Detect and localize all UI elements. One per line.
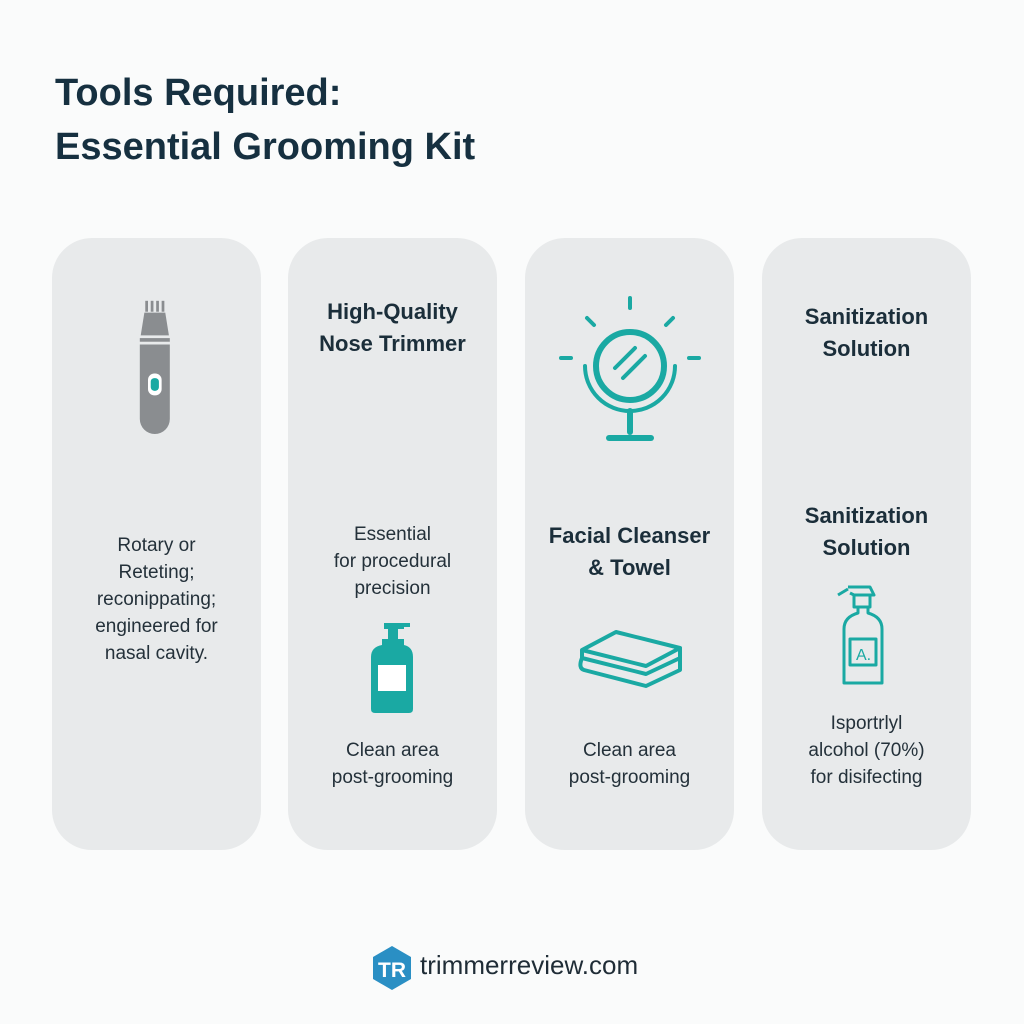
text: trimmer desc [95, 535, 218, 664]
text [808, 713, 925, 788]
icon: spray bottle [837, 586, 884, 684]
text: Essential [354, 524, 431, 545]
text: trimmer desc: Rotary or [117, 535, 196, 556]
title [55, 72, 475, 168]
text: Isportrlyl [831, 713, 902, 734]
heading: Sanitization [805, 304, 928, 329]
text: post-grooming [332, 767, 453, 788]
heading [549, 523, 710, 580]
logo [373, 946, 638, 990]
heading: Solution [822, 535, 910, 560]
heading: Solution [822, 336, 910, 361]
icon: towel [578, 630, 682, 688]
icon: pump bottle [371, 623, 413, 713]
heading: Nose Trimmer [319, 331, 466, 356]
heading: & Towel [588, 555, 671, 580]
title: Tools Required: [55, 72, 341, 114]
text: url: trimmerreview.com [420, 950, 638, 980]
heading [805, 503, 928, 560]
panel: nose trimmer [288, 238, 497, 850]
icon: TR hexagon: TR [378, 959, 406, 982]
icon: spray bottle: A. [856, 647, 871, 664]
text: precision [354, 578, 431, 599]
title: Essential Grooming Kit [55, 126, 475, 168]
heading: High-Quality [327, 299, 458, 324]
panel: sanitization [762, 238, 971, 850]
text: trimmer desc: nasal cavity. [105, 643, 208, 664]
text: for procedural [334, 551, 451, 572]
heading: Facial Cleanser [549, 523, 710, 548]
panel: trimmer [52, 238, 261, 850]
text: alcohol (70%) [808, 740, 925, 761]
icon: TR hexagon [373, 946, 411, 990]
heading: Sanitization [805, 503, 928, 528]
heading [805, 304, 928, 361]
text: trimmer desc: reconippating; [97, 589, 216, 610]
text: trimmer desc: Reteting; [118, 562, 195, 583]
text: Clean area [346, 740, 439, 761]
text [569, 740, 690, 788]
panel: cleanser [525, 238, 734, 850]
heading [319, 299, 466, 356]
icon: mirror [559, 296, 701, 441]
text: post-grooming [569, 767, 690, 788]
text [332, 740, 453, 788]
icon: trimmer [140, 300, 170, 434]
text [334, 524, 451, 599]
text: trimmer desc: engineered for [95, 616, 218, 637]
text: Clean area [583, 740, 676, 761]
text: for disifecting [811, 767, 922, 788]
